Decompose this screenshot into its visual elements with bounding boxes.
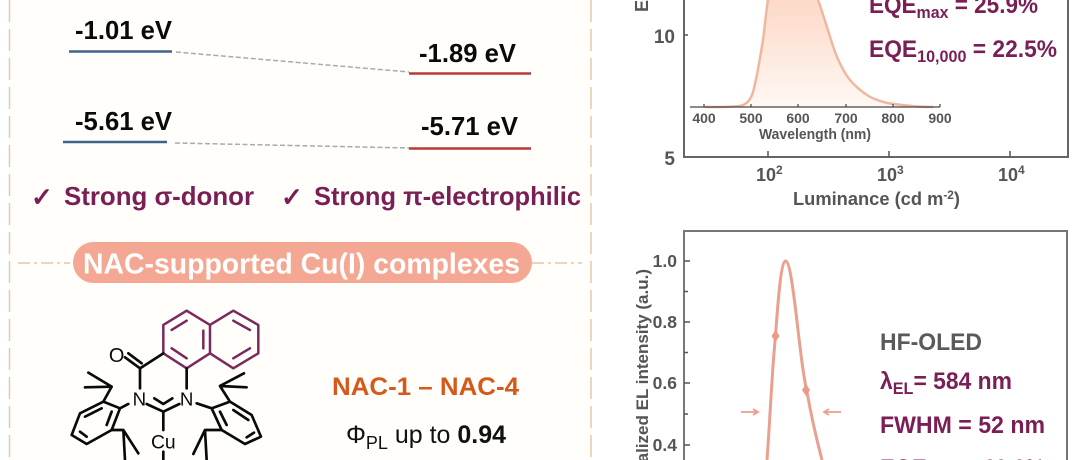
EQE values: = 22.5% <box>966 36 1057 63</box>
chemical structure: O <box>109 345 124 367</box>
chart: EQE versus luminance: 10 <box>877 165 897 185</box>
photoluminescence quantum yield: PL <box>366 433 388 453</box>
chemical structure: Cu <box>151 433 176 454</box>
energy level diagram: -1.89 eV <box>419 38 517 68</box>
device metrics: = 584 nm <box>913 368 1012 395</box>
chart: EQE versus luminance: ) <box>954 188 960 209</box>
inset: EL spectrum: 800 <box>881 110 905 126</box>
chart: EQE versus luminance: 10 <box>756 165 776 185</box>
chemical structure <box>72 311 261 460</box>
photoluminescence quantum yield: Φ <box>346 421 366 449</box>
energy level diagram: -1.01 eV <box>75 15 173 45</box>
EQE values: max <box>917 3 949 22</box>
property checks: ✓ <box>281 183 303 213</box>
FWHM arrows <box>741 409 841 415</box>
photoluminescence quantum yield: up to <box>388 421 457 449</box>
energy level diagram <box>63 15 531 148</box>
property checks: ✓ <box>31 183 53 213</box>
inset: EL spectrum: 600 <box>786 110 810 126</box>
chemical structure: N <box>133 388 146 409</box>
chart: EQE versus luminance: 4 <box>1018 163 1025 177</box>
inset: EL spectrum: 400 <box>692 110 716 126</box>
complex label: NAC-1 – NAC-4 <box>332 373 519 401</box>
chart: EQE versus luminance: Luminance (cd m <box>793 188 945 209</box>
inset: EL spectrum: 500 <box>739 110 763 126</box>
inset: EL spectrum <box>690 0 952 143</box>
y axis title fragment: E <box>632 0 652 12</box>
device metrics: EL <box>893 379 913 398</box>
chart: EQE versus luminance: 10 <box>654 27 675 48</box>
EQE values <box>869 0 1057 66</box>
chart: EQE versus luminance: 5 <box>664 149 675 170</box>
energy level diagram: -5.61 eV <box>75 106 173 136</box>
chart: EL spectrum: 0.4 <box>653 435 677 455</box>
chart: EQE versus luminance: -2 <box>943 188 954 202</box>
energy level diagram: -5.71 eV <box>421 111 519 141</box>
chemical structure: N <box>180 388 193 409</box>
chart: EQE versus luminance: 2 <box>776 163 783 177</box>
EQE values: 10,000 <box>917 47 966 66</box>
chart: EL spectrum <box>633 231 1067 460</box>
chart: EQE versus luminance: 10 <box>998 165 1018 185</box>
property checks: Strong σ-donor <box>64 181 254 211</box>
inset: EL spectrum: 700 <box>834 110 858 126</box>
inset: EL spectrum: 900 <box>928 110 952 126</box>
chart: EQE versus luminance <box>632 0 1068 209</box>
device metrics <box>880 329 1045 460</box>
chart: EL spectrum: 0.6 <box>653 373 677 393</box>
chart: EL spectrum: 1.0 <box>653 251 677 271</box>
property checks: Strong π-electrophilic <box>314 181 581 211</box>
section divider lines <box>18 262 582 264</box>
device metrics: HF-OLED <box>880 329 982 356</box>
device metrics: FWHM = 52 nm <box>880 412 1045 439</box>
EQE values: EQE <box>869 36 920 63</box>
EL curve <box>767 261 822 460</box>
chart: EQE versus luminance: 3 <box>897 163 904 177</box>
data markers <box>772 330 810 396</box>
chart: EL spectrum: 0.8 <box>653 312 677 332</box>
inset: EL spectrum: Wavelength (nm) <box>759 127 871 143</box>
photoluminescence quantum yield: 0.94 <box>457 421 506 449</box>
heading pill: NAC-supported Cu(I) complexes: NAC-supported Cu(I) complexes <box>83 248 520 280</box>
property checks <box>31 181 581 213</box>
panel: NAC ligand design <box>10 0 591 460</box>
device metrics: λ <box>880 368 893 395</box>
